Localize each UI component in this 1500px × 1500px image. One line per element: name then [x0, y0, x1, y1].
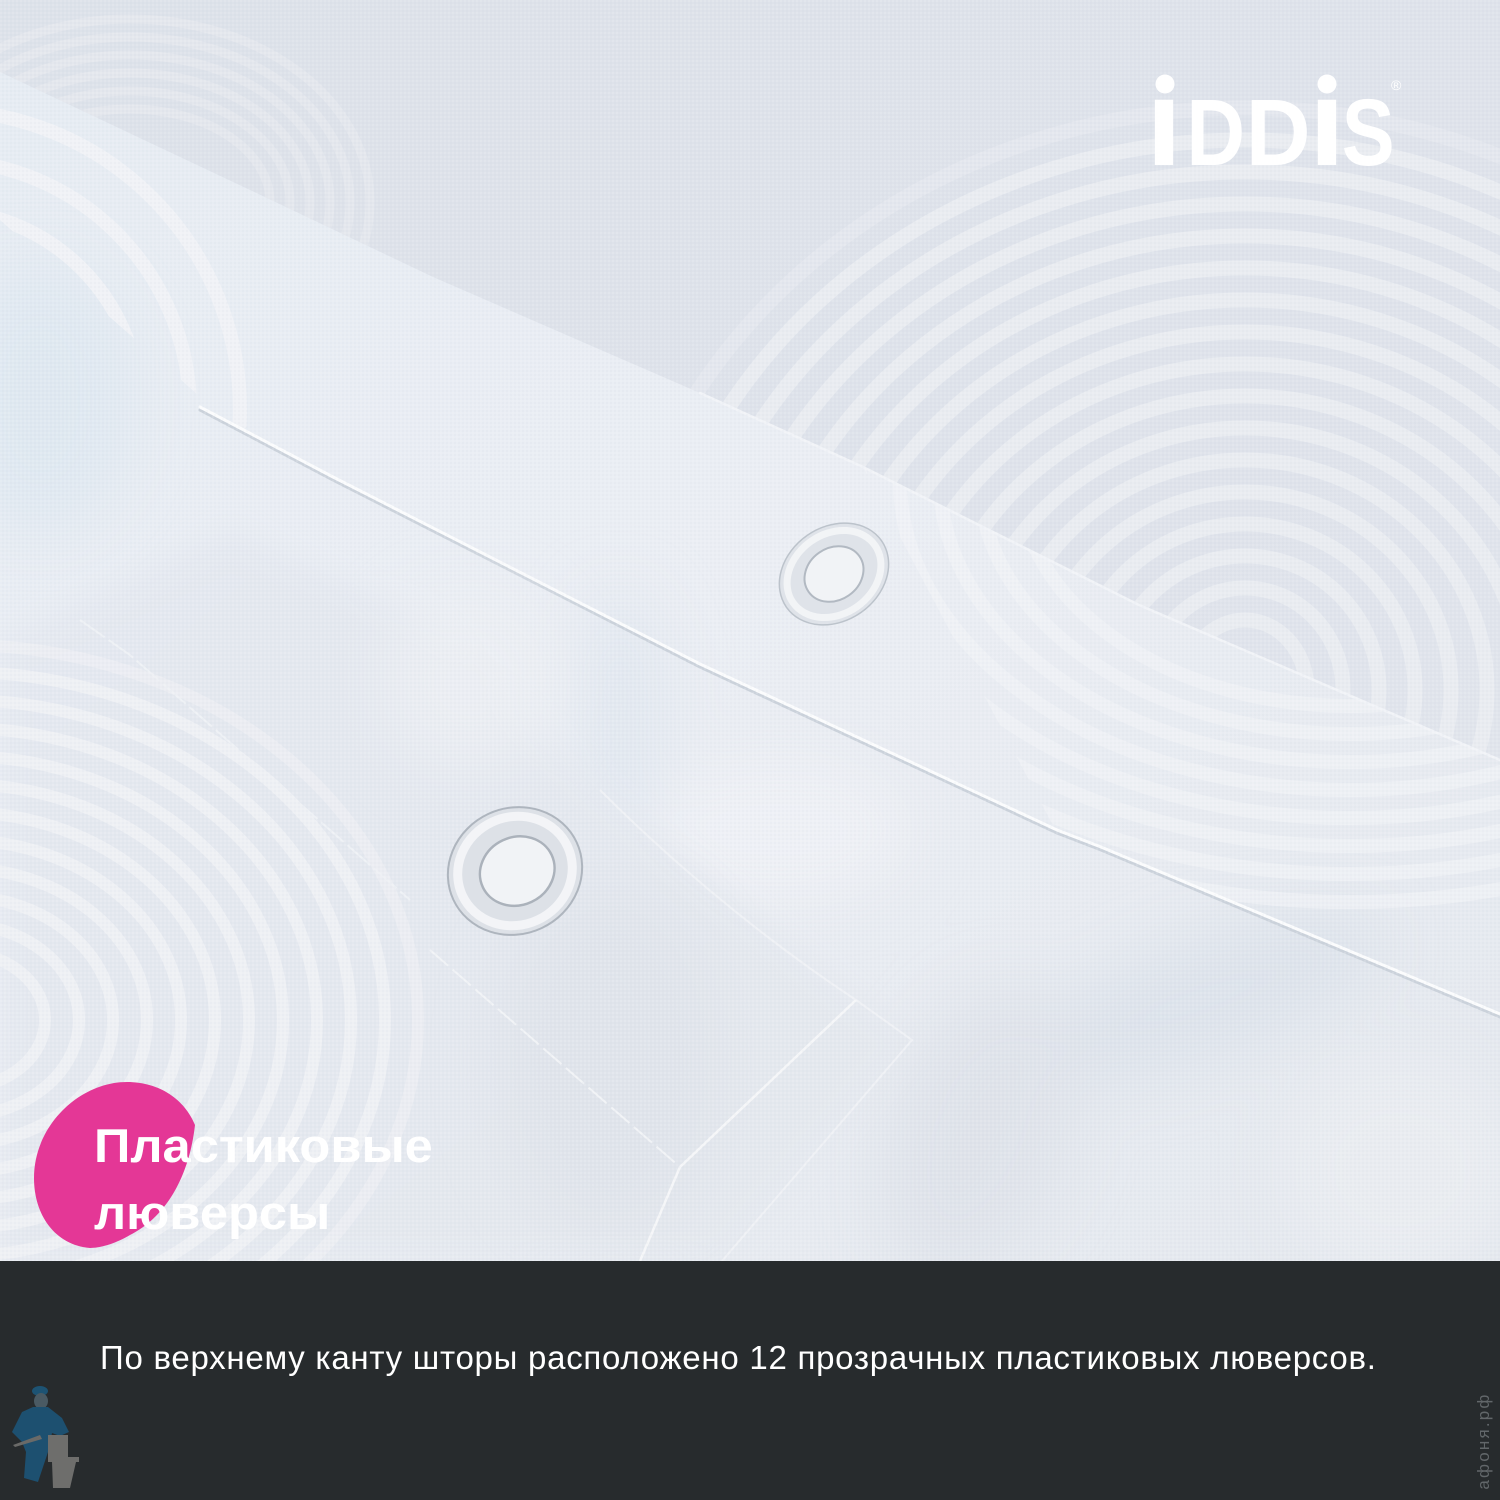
logo: IDDIS	[1146, 74, 1402, 186]
footer bar	[0, 1261, 1500, 1500]
icon: plumber with toilet watermark	[12, 1386, 79, 1488]
ring pattern on upper-left fold	[0, 109, 244, 428]
description text: По верхнему канту шторы расположено 12 прозрачных пластиковых люверсов.	[100, 1339, 1377, 1376]
concentric ring pattern top right	[724, 132, 1500, 752]
logo: IDDIS: S	[1342, 81, 1395, 186]
ring pattern on right band	[1236, 872, 1407, 909]
flap edge and seam	[80, 620, 912, 1261]
hem band and lower fabric	[0, 72, 1500, 1261]
lower flap with corner	[0, 530, 912, 1261]
pink blob badge	[34, 1082, 195, 1248]
heading: Пластиковые	[94, 1119, 433, 1172]
stitch lines on hem	[200, 393, 1500, 1017]
logo: IDDIS: I	[1146, 80, 1182, 185]
ring pattern on lower-left flap	[0, 645, 418, 1395]
soft fold shading	[0, 270, 1500, 1302]
heading	[94, 1119, 433, 1239]
flap shading	[380, 590, 720, 1230]
logo: IDDIS: I	[1309, 80, 1345, 185]
concentric ring pattern top left	[0, 19, 370, 385]
icon: upper grommet	[760, 502, 908, 646]
icon: lower grommet	[427, 785, 603, 957]
vertical site label: афоня.рф	[1474, 1392, 1493, 1490]
logo: IDDIS: D	[1246, 80, 1311, 186]
logo: IDDIS: D	[1186, 79, 1245, 185]
logo: IDDIS: ®	[1391, 77, 1402, 93]
heading: люверсы	[94, 1186, 330, 1239]
